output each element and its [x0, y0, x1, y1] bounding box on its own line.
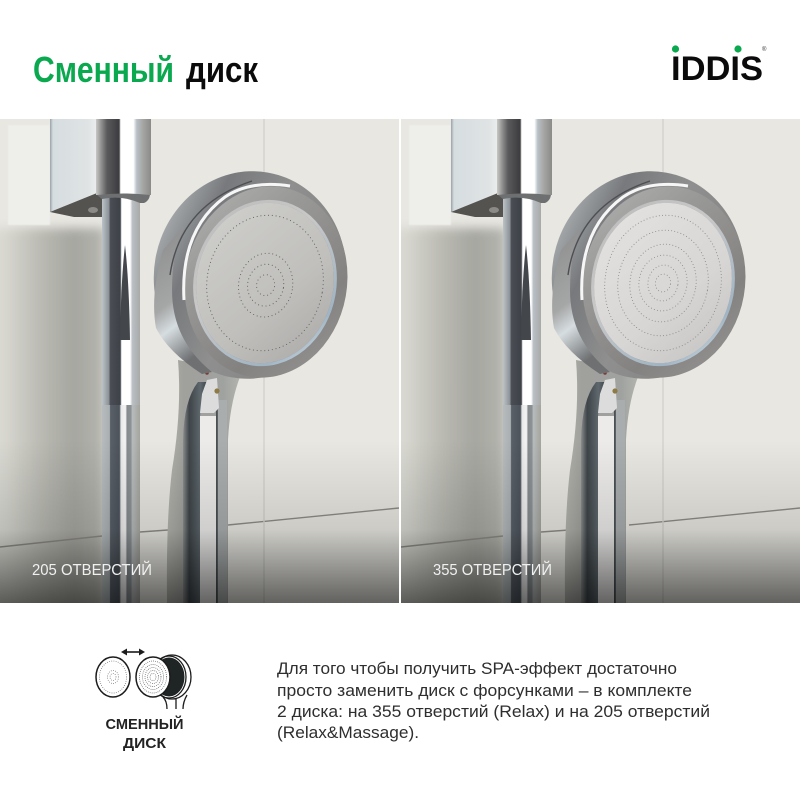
hand shower handle — [565, 360, 640, 603]
caption: 205 holes: 205 ОТВЕРСТИЙ — [32, 561, 152, 579]
hand shower handle — [167, 360, 242, 603]
panel: photo 355 holes — [381, 119, 800, 628]
caption: 355 holes: 355 ОТВЕРСТИЙ — [433, 561, 552, 579]
shower head — [552, 171, 746, 379]
icon: dark cavity — [154, 658, 184, 696]
shower head — [154, 171, 348, 379]
wall bracket — [451, 119, 501, 212]
icon: disc 355 — [136, 657, 170, 697]
logo: IDDIS: IDDIS — [671, 50, 763, 88]
description text: Для того чтобы получить SPA-эффект достаточно — [277, 660, 677, 678]
icon label: ДИСК — [123, 736, 166, 752]
logo: IDDIS: ® — [762, 46, 767, 53]
description text: просто заменить диск с форсунками – в комплекте — [277, 682, 692, 700]
tile seams — [0, 508, 399, 547]
icon: disc 205 — [96, 657, 130, 697]
wall — [401, 119, 800, 603]
disc with 205 nozzles — [196, 203, 334, 363]
bottom fade — [401, 466, 800, 603]
tile seams — [401, 508, 800, 547]
icon: double arrow — [121, 648, 145, 656]
shower rail — [96, 119, 151, 603]
icon: replaceable disc — [96, 648, 191, 752]
wall bracket — [50, 119, 100, 212]
icon label — [106, 715, 184, 752]
shower rail — [497, 119, 552, 603]
bottom fade — [0, 466, 399, 603]
description text — [277, 660, 710, 742]
wall — [0, 119, 399, 603]
wall shadow — [401, 222, 503, 603]
icon label: СМЕННЫЙ — [106, 715, 184, 733]
title: диск — [186, 49, 259, 90]
icon: handle and rear shell — [152, 655, 191, 709]
description text: 2 диска: на 355 отверстий (Relax) и на 205 отверстий — [277, 703, 710, 721]
wall shadow — [0, 228, 105, 628]
disc with 355 nozzles — [594, 202, 732, 364]
description text: (Relax&Massage). — [277, 724, 419, 742]
title: Сменный — [33, 49, 174, 90]
panel: photo 205 holes — [0, 119, 399, 628]
